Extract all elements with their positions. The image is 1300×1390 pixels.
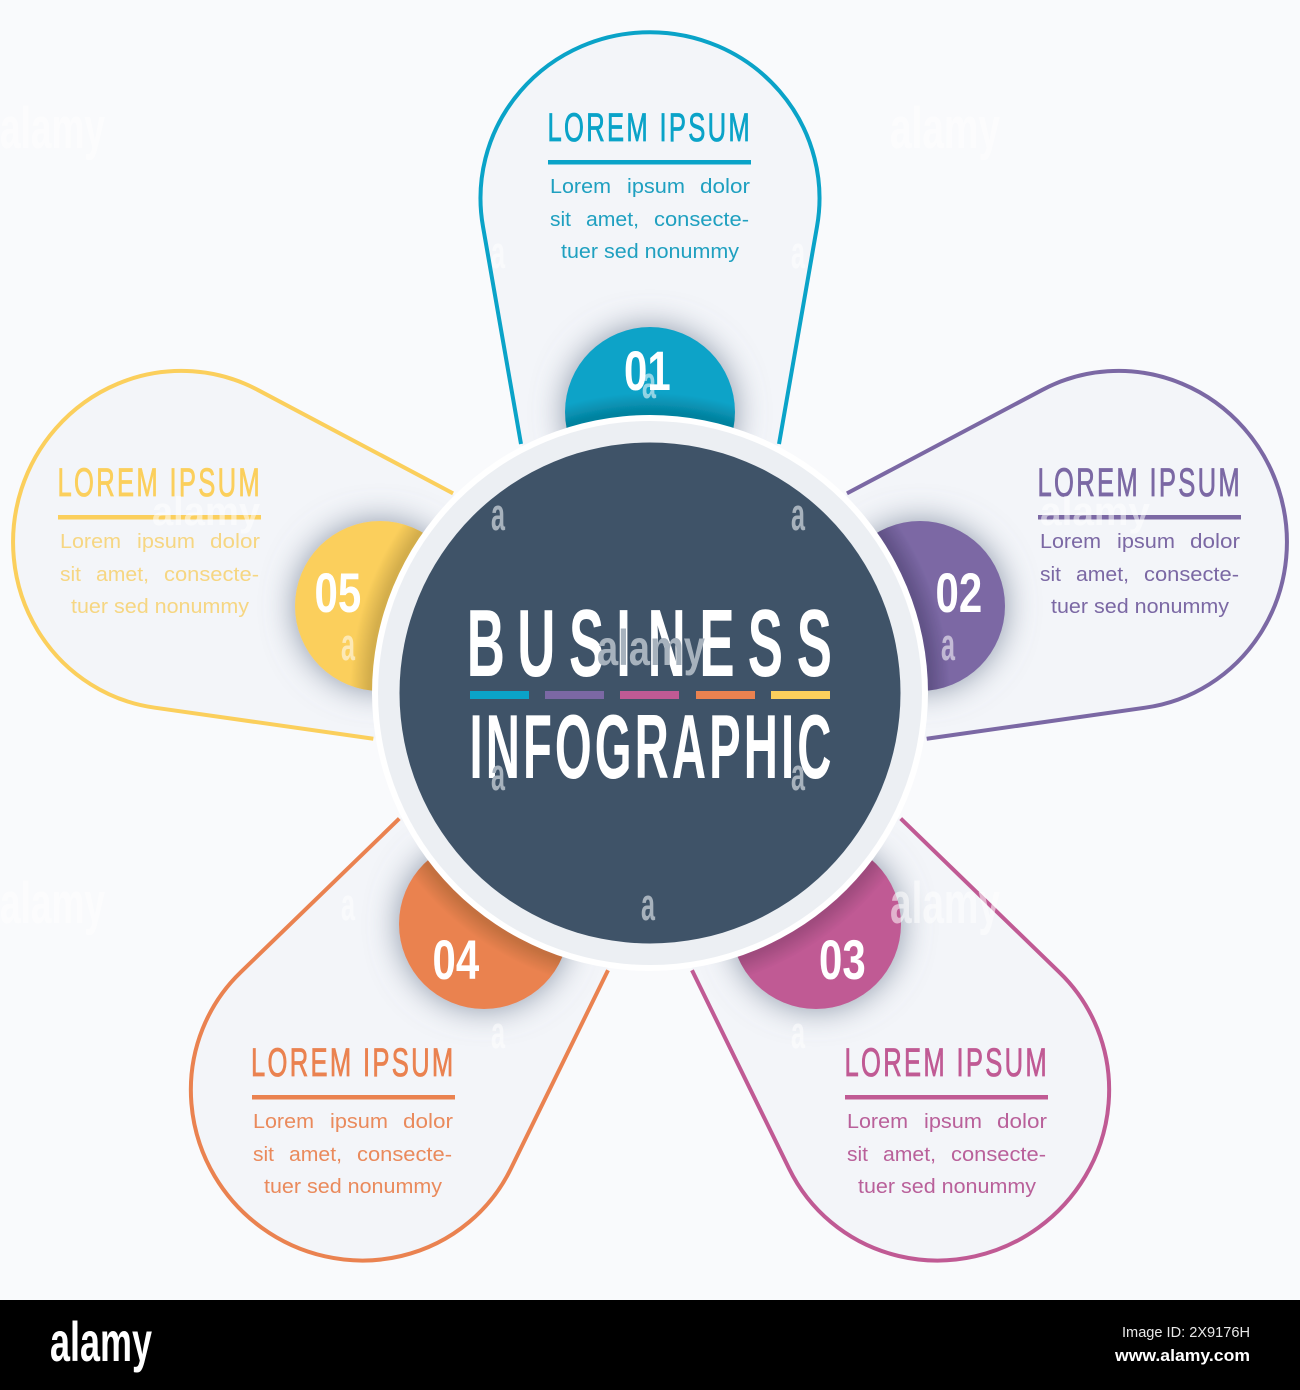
heading 02: LOREM IPSUM: [1038, 461, 1240, 506]
panel: 02: [598, 328, 1300, 854]
body text 02: amet,: [1076, 564, 1129, 586]
watermarks on light areas: alamy: [890, 871, 1000, 936]
body text 04: consecte-: [357, 1144, 452, 1166]
body text 05: Lorem: [60, 531, 121, 553]
body text 02: dolor: [1190, 531, 1240, 553]
number 01: 01: [624, 340, 671, 402]
body text 05: dolor: [210, 531, 260, 553]
watermarks on light areas: alamy: [0, 871, 105, 936]
watermarks on dark circle: [491, 489, 806, 930]
heading 03: LOREM IPSUM: [844, 1041, 1047, 1086]
watermarks on light areas: a: [791, 227, 806, 278]
watermarks on light areas: a: [341, 619, 356, 670]
body text 02: tuer sed nonummy: [1051, 596, 1229, 618]
website: www.alamy.com: [1114, 1346, 1250, 1365]
colour key bars: [470, 691, 830, 699]
watermarks on light areas: alamy: [152, 490, 261, 534]
image id: Image ID: 2X9176H: [1122, 1324, 1250, 1341]
number 04: 04: [432, 929, 480, 991]
watermarks on dark circle: alamy: [597, 620, 705, 676]
footer bar: [0, 1300, 1300, 1390]
watermarks on light areas: alamy: [0, 96, 105, 161]
body text 03: [847, 1111, 1047, 1198]
body text 05: [60, 531, 260, 618]
watermarks on light areas: a: [941, 619, 956, 670]
number 02: 02: [936, 562, 982, 624]
petal outline 04: [124, 593, 787, 1327]
watermarks on light areas: a: [642, 357, 657, 408]
watermarks on dark circle: a: [491, 489, 506, 540]
body text 03: sit: [847, 1144, 868, 1166]
number badge 05: [295, 521, 465, 691]
underline 04: [252, 1095, 455, 1100]
body text 02: Lorem: [1040, 531, 1101, 553]
title: INFOGRAPHIC: INFOGRAPHIC: [470, 696, 831, 798]
underline 01: [548, 160, 751, 164]
body text 03: amet,: [883, 1144, 936, 1166]
underline 02: [1038, 515, 1241, 520]
body text 02: [1040, 531, 1240, 618]
body text 01: amet,: [586, 209, 639, 231]
petal outline 01: [480, 32, 820, 693]
number badge 01: [565, 327, 735, 497]
body text 03: Lorem: [847, 1111, 908, 1133]
body text 05: amet,: [96, 564, 149, 586]
body text 04: sit: [253, 1144, 274, 1166]
number 05: 05: [314, 562, 361, 624]
watermarks on light areas: alamy: [890, 96, 1000, 161]
body text 05: consecte-: [164, 564, 259, 586]
body text 01: dolor: [700, 176, 750, 198]
title: BUSINESS: BUSINESS: [467, 590, 832, 697]
body text 05: sit: [60, 564, 81, 586]
body text 02: ipsum: [1117, 531, 1175, 553]
number badge 02: [835, 521, 1005, 691]
body text 04: dolor: [403, 1111, 453, 1133]
watermarks on dark circle: a: [491, 749, 506, 800]
heading 04: LOREM IPSUM: [251, 1041, 453, 1086]
watermarks on dark circle: a: [791, 749, 806, 800]
panel: 01: [480, 32, 820, 693]
body text 01: ipsum: [627, 176, 685, 198]
watermarks on light areas: a: [491, 227, 506, 278]
panel: 04: [124, 593, 787, 1327]
number badge 04: [399, 839, 569, 1009]
body text 01: Lorem: [550, 176, 611, 198]
body text 03: tuer sed nonummy: [858, 1176, 1036, 1198]
body text 01: [550, 176, 750, 263]
underline 03: [845, 1095, 1048, 1100]
petal outline 03: [513, 593, 1176, 1327]
body text 05: ipsum: [137, 531, 195, 553]
number 03: 03: [819, 929, 866, 991]
petal outline 05: [0, 328, 702, 854]
body text 04: amet,: [289, 1144, 342, 1166]
body text 01: tuer sed nonummy: [561, 241, 739, 263]
watermarks on light areas: alamy: [1040, 490, 1151, 534]
body text 01: sit: [550, 209, 571, 231]
body text 04: tuer sed nonummy: [264, 1176, 442, 1198]
footer logo: alamy: [50, 1310, 152, 1373]
panel: 05: [0, 328, 702, 854]
body text 03: ipsum: [924, 1111, 982, 1133]
body text 03: dolor: [997, 1111, 1047, 1133]
body text 02: sit: [1040, 564, 1061, 586]
body text 04: ipsum: [330, 1111, 388, 1133]
watermarks on light areas: a: [791, 1007, 806, 1058]
body text 04: Lorem: [253, 1111, 314, 1133]
body text 01: consecte-: [654, 209, 749, 231]
center circle: [372, 415, 928, 971]
body text 04: [253, 1111, 453, 1198]
watermarks on dark circle: a: [791, 489, 806, 540]
heading 05: LOREM IPSUM: [58, 461, 260, 506]
number badge 03: [731, 839, 901, 1009]
watermarks on light areas: a: [491, 1007, 506, 1058]
petal outline 02: [598, 328, 1300, 854]
panel: 03: [513, 593, 1176, 1327]
watermarks on light areas: [0, 96, 1151, 1058]
watermarks on light areas: a: [341, 879, 356, 930]
body text 05: tuer sed nonummy: [71, 596, 249, 618]
heading 01: LOREM IPSUM: [548, 106, 750, 151]
underline 05: [58, 515, 261, 520]
watermarks on dark circle: a: [641, 879, 656, 930]
body text 03: consecte-: [951, 1144, 1046, 1166]
body text 02: consecte-: [1144, 564, 1239, 586]
